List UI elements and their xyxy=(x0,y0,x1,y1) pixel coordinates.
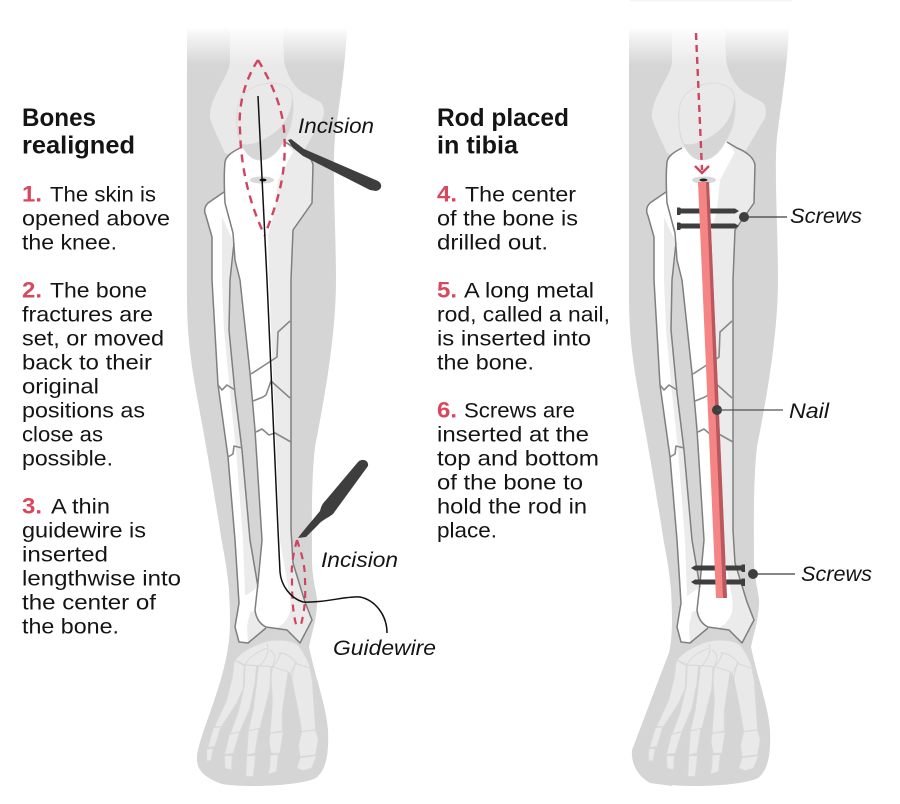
step 2 text: set, or moved xyxy=(22,328,164,351)
step 2 text: The bone xyxy=(50,280,147,303)
label: lower screws: Screws xyxy=(801,563,873,586)
step 3 text: A thin xyxy=(51,496,110,519)
callout: upper screws xyxy=(739,212,787,222)
faint top edge of right panel xyxy=(630,0,792,2)
drill hole xyxy=(700,178,708,182)
step 1 text: opened above xyxy=(22,208,170,231)
step 6 text: hold the rod in xyxy=(437,496,587,519)
step 3 text: 3. xyxy=(22,494,42,519)
heading: rod placed in tibia: Rod placed xyxy=(437,104,569,132)
step 3 text: inserted xyxy=(22,544,108,567)
step 4 text: 4. xyxy=(437,182,457,207)
step 5 text xyxy=(437,278,610,375)
callout: nail xyxy=(712,405,783,415)
step 6 text: 6. xyxy=(437,398,457,423)
left leg illustration xyxy=(186,27,387,786)
label: lower incision: Incision xyxy=(321,549,398,572)
step 4 text: of the bone is xyxy=(437,208,578,231)
step 3 text: guidewire is xyxy=(22,520,146,543)
callout: lower screws xyxy=(748,569,795,579)
step 6 text: inserted at the xyxy=(437,424,589,447)
heading: rod placed in tibia: in tibia xyxy=(437,132,519,160)
heading: rod placed in tibia xyxy=(437,104,569,160)
arrow head xyxy=(695,166,709,173)
step 1 text: the knee. xyxy=(22,232,117,255)
guidewire xyxy=(258,96,387,633)
step 3 text xyxy=(22,494,181,639)
heading: bones realigned: realigned xyxy=(22,132,135,160)
step 2 text: original xyxy=(22,376,99,399)
step 6 text: top and bottom xyxy=(437,448,599,471)
dashed insertion arrow xyxy=(696,33,702,170)
step 3 text: lengthwise into xyxy=(22,568,181,591)
step 5 text: 5. xyxy=(437,278,457,303)
nail rod xyxy=(698,182,727,598)
step 3 text: the center of xyxy=(22,592,156,615)
step 5 text: rod, called a nail, xyxy=(437,304,610,327)
step 2 text: positions as xyxy=(22,400,145,423)
step 4 text: drilled out. xyxy=(437,232,548,255)
step 5 text: the bone. xyxy=(437,352,534,375)
label: upper incision: Incision xyxy=(298,115,374,138)
step 2 text: possible. xyxy=(22,448,113,471)
step 5 text: A long metal xyxy=(464,280,594,303)
heading: bones realigned: Bones xyxy=(22,104,96,132)
label: nail: Nail xyxy=(789,400,830,423)
lower incision dashed line xyxy=(292,540,305,628)
step 5 text: is inserted into xyxy=(437,328,591,351)
lower screws xyxy=(691,564,745,586)
step 2 text: close as xyxy=(22,424,103,447)
step 2 text: 2. xyxy=(22,278,42,303)
step 6 text: place. xyxy=(437,520,497,543)
heading: bones realigned xyxy=(22,104,135,160)
right leg illustration xyxy=(628,27,795,786)
step 1 text xyxy=(22,182,170,255)
wider left side of right foot xyxy=(632,650,690,786)
step 6 text: of the bone to xyxy=(437,472,583,495)
upper incision dashed line xyxy=(240,60,285,236)
step 2 text xyxy=(22,278,164,471)
step 2 text: back to their xyxy=(22,352,152,375)
step 6 text: Screws are xyxy=(464,400,575,423)
icon: drill hole left xyxy=(260,178,266,182)
step 1 text: The skin is xyxy=(50,184,156,207)
icon: lower scalpel xyxy=(298,460,368,538)
step 4 text: The center xyxy=(465,184,576,207)
step 2 text: fractures are xyxy=(22,304,153,327)
upper screws xyxy=(677,208,739,230)
step 3 text: the bone. xyxy=(22,616,119,639)
icon: upper scalpel xyxy=(288,139,381,191)
step 1 text: 1. xyxy=(22,182,42,207)
label: upper screws: Screws xyxy=(790,205,863,228)
step 4 text xyxy=(437,182,578,255)
step 6 text xyxy=(437,398,599,543)
label: guidewire: Guidewire xyxy=(333,637,436,660)
